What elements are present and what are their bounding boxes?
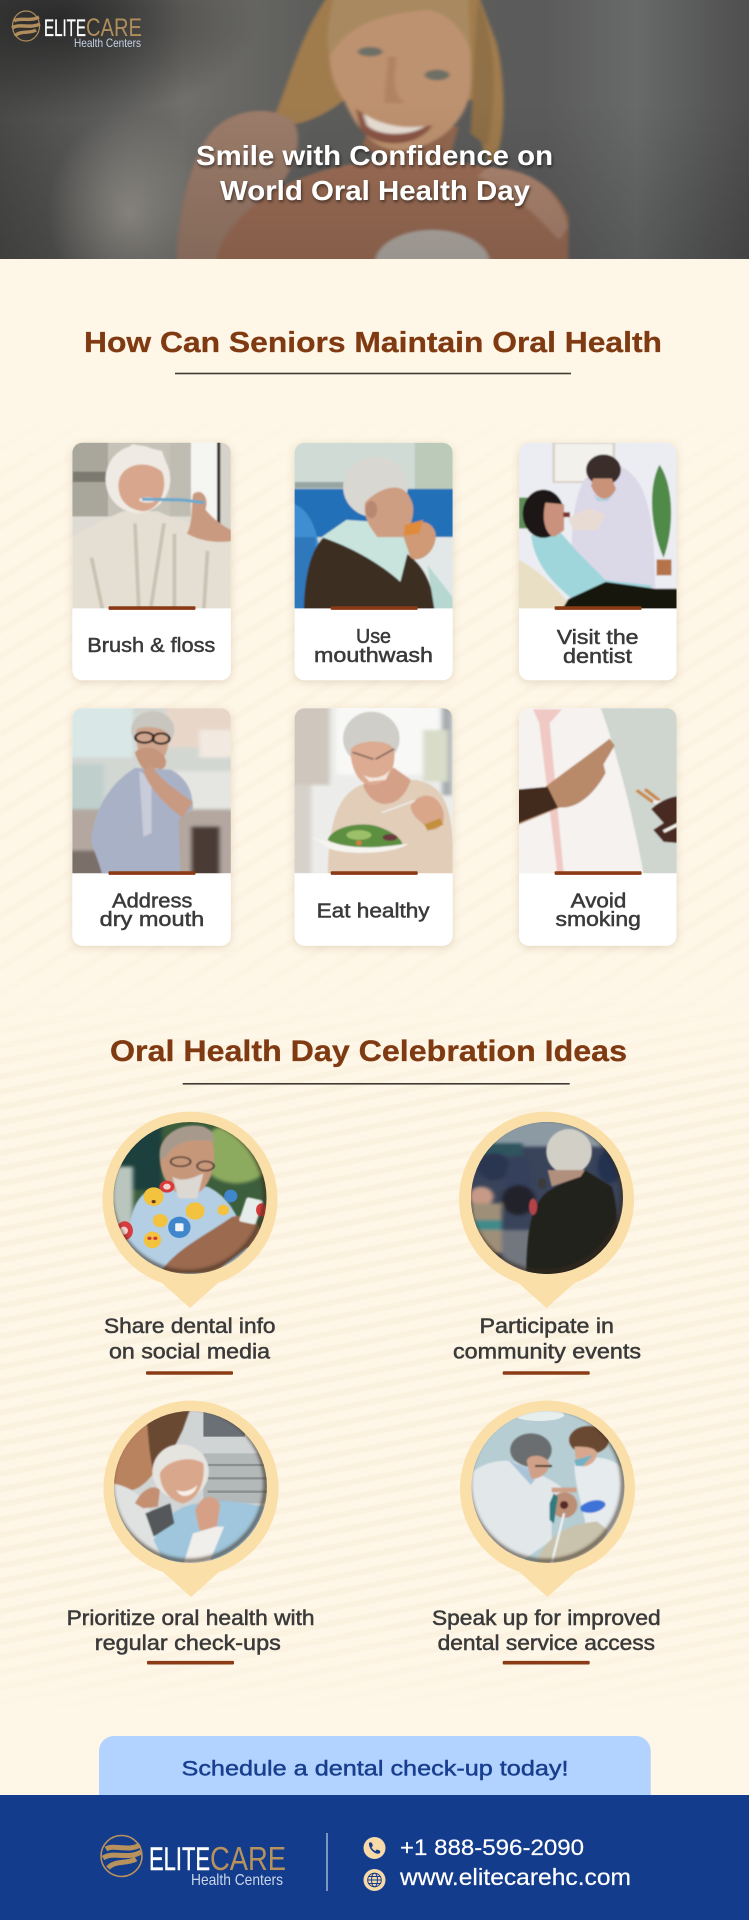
label xyxy=(432,1607,661,1655)
website: www.elitecarehc.com xyxy=(399,1864,631,1890)
logo wordmark: Health Centers xyxy=(74,36,141,50)
logo wordmark xyxy=(149,1840,286,1889)
accent bar xyxy=(503,1371,590,1375)
label xyxy=(557,627,638,668)
label: Prioritize oral health with xyxy=(67,1607,315,1630)
hero title: Smile with Confidence on xyxy=(196,140,553,171)
logo: Elite Care xyxy=(12,11,142,50)
pin marker xyxy=(103,1401,278,1597)
hero title: World Oral Health Day xyxy=(220,175,530,206)
logo wordmark xyxy=(44,14,142,50)
accent bar xyxy=(146,1371,233,1375)
photo: refusing a cigarette xyxy=(519,708,676,874)
photo: man with phone and emojis xyxy=(114,1122,266,1274)
photo: woman eating salad xyxy=(294,708,452,874)
card: Eat healthy xyxy=(286,699,460,946)
accent bar xyxy=(147,1661,234,1664)
photo: woman covering mouth xyxy=(72,708,231,874)
accent bar xyxy=(108,606,196,610)
label: Visit the xyxy=(557,627,638,649)
card: Use mouthwash xyxy=(286,434,460,680)
hero photo: smiling woman xyxy=(0,0,749,259)
icon: phone xyxy=(364,1837,386,1859)
call to action: Schedule a dental check-up today! xyxy=(182,1757,568,1781)
heading: Oral Health Day Celebration Ideas: Oral Health Day Celebration Ideas xyxy=(110,1035,627,1068)
icon: logo emblem xyxy=(101,1836,142,1876)
label: Address xyxy=(112,890,192,912)
label: Speak up for improved xyxy=(432,1607,661,1630)
label: regular check-ups xyxy=(95,1632,281,1655)
logo wordmark: ELITE xyxy=(149,1841,210,1877)
hero banner xyxy=(0,0,749,259)
label: dental service access xyxy=(438,1632,655,1655)
accent bar xyxy=(555,871,642,875)
accent bar xyxy=(331,606,418,610)
photo: dentist and patient xyxy=(519,442,676,608)
label: Avoid xyxy=(571,890,626,912)
accent bar xyxy=(555,606,642,610)
phone number: +1 888-596-2090 xyxy=(400,1835,584,1860)
card: Avoid smoking xyxy=(510,699,684,946)
contact details xyxy=(364,1835,631,1891)
accent bar xyxy=(503,1661,590,1664)
label: smoking xyxy=(556,909,641,931)
logo wordmark: ELITE xyxy=(44,15,86,42)
pin marker xyxy=(459,1112,634,1308)
call to action xyxy=(99,1736,651,1796)
label xyxy=(104,1315,276,1364)
photo: woman brushing teeth xyxy=(72,442,231,608)
label xyxy=(314,626,433,667)
idea: Participate in community events xyxy=(453,1112,641,1375)
footer logo xyxy=(101,1836,286,1889)
idea: Share dental info on social media xyxy=(102,1112,278,1375)
photo: dentist with smiling senior xyxy=(114,1411,267,1563)
accent bar xyxy=(108,871,196,875)
pin marker xyxy=(460,1401,635,1597)
photo: man rinsing xyxy=(294,442,453,608)
card: Visit the dentist xyxy=(510,434,684,680)
label: Use xyxy=(356,626,391,648)
card: Address dry mouth xyxy=(62,699,241,946)
pin marker xyxy=(102,1112,278,1308)
icon: logo emblem xyxy=(12,11,40,41)
label: mouthwash xyxy=(314,645,433,667)
label xyxy=(453,1315,641,1364)
idea: Speak up for improved dental service access xyxy=(432,1401,661,1664)
logo wordmark: CARE xyxy=(86,14,142,42)
photo: speaker and audience xyxy=(471,1122,623,1274)
heading: How Can Seniors Maintain Oral Health: How Can Seniors Maintain Oral Health xyxy=(84,327,662,359)
logo wordmark: Health Centers xyxy=(191,1872,283,1889)
idea: Prioritize oral health with regular check-ups xyxy=(67,1401,315,1664)
label xyxy=(100,890,204,931)
photo: dentist team treating patient xyxy=(472,1411,624,1563)
card: Brush & floss xyxy=(62,434,241,680)
label xyxy=(556,890,641,931)
label: Participate in xyxy=(480,1315,614,1338)
label: Eat healthy xyxy=(317,901,430,923)
label: dry mouth xyxy=(100,909,204,931)
label xyxy=(67,1607,315,1655)
icon: globe xyxy=(364,1869,386,1891)
label: dentist xyxy=(563,646,633,668)
logo wordmark: CARE xyxy=(210,1840,286,1877)
label: Share dental info xyxy=(104,1315,276,1338)
hero title xyxy=(196,140,553,206)
label: community events xyxy=(453,1340,641,1364)
footer band xyxy=(0,1795,749,1920)
label: Brush & floss xyxy=(87,635,215,657)
label: on social media xyxy=(109,1340,270,1364)
accent bar xyxy=(331,871,418,875)
